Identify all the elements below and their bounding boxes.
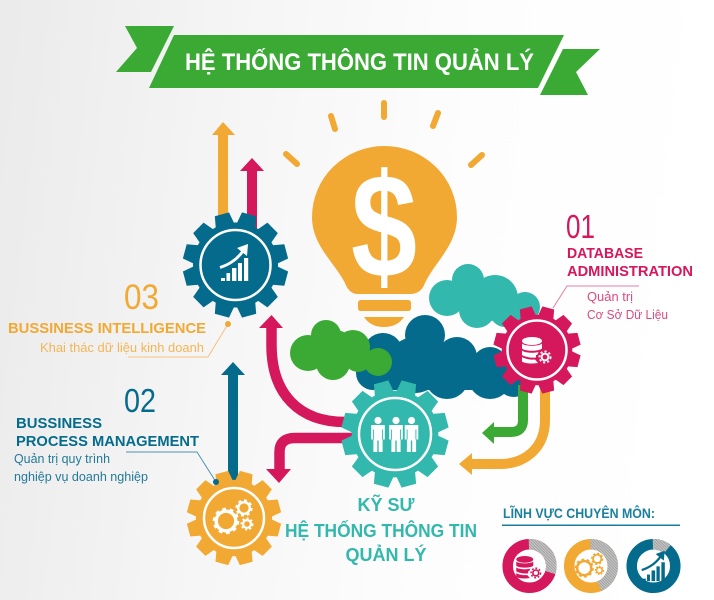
label 01: database administration: ADMINISTRATION [567, 263, 693, 280]
legend: fields of expertise: LĨNH VỰC CHUYÊN MÔN: [503, 504, 655, 521]
bulb base [358, 300, 411, 311]
light bulb with dollar sign [286, 103, 482, 327]
center label: engineer [285, 494, 477, 565]
arrow: green curved left [482, 385, 523, 444]
label 02: business process management: 02 [124, 382, 156, 419]
label 01: database administration [553, 208, 693, 322]
label 01: database administration: Quản trị [587, 290, 633, 304]
center label: engineer: HỆ THỐNG THÔNG TIN [285, 520, 477, 541]
title: HỆ THỐNG THÔNG TIN QUẢN LÝ [185, 47, 534, 76]
arrow: pink curved up [259, 315, 352, 422]
dark blue cloud [356, 315, 533, 399]
gear: engineers [341, 380, 449, 488]
label 03: business intelligence [8, 278, 231, 357]
arrow: blue up [221, 362, 245, 482]
arrow: orange up [212, 122, 235, 225]
label 03: business intelligence: Khai thác dữ liệu kinh doanh [40, 340, 204, 355]
gear: process management [186, 470, 282, 566]
banner body [149, 35, 564, 88]
dollar sign: $ [351, 144, 417, 309]
label 02: business process management: PROCESS MANAGEMENT [16, 433, 199, 450]
label 02: business process management: nghiệp vụ doanh nghiệp [14, 470, 148, 484]
center label: engineer: KỸ SƯ [358, 494, 415, 515]
label 02: business process management [14, 382, 219, 485]
arrow: orange curved left [459, 385, 545, 475]
donut: chart [632, 544, 675, 588]
clouds [290, 264, 540, 399]
gear: business intelligence [182, 212, 289, 318]
label 02: business process management: Quản trị quy trình [14, 452, 110, 466]
green cloud [290, 320, 392, 380]
icon: database [522, 337, 553, 365]
arrow: pink curved down [266, 438, 352, 483]
label 03: business intelligence: 03 [124, 278, 159, 317]
center label: engineer: QUẢN LÝ [346, 544, 426, 565]
gear: database [493, 306, 581, 394]
bulb glass [312, 146, 457, 294]
icon: cogs [214, 500, 252, 533]
title banner [116, 26, 600, 95]
teal cloud [429, 264, 540, 328]
banner right tail [540, 49, 600, 95]
icon: three people [371, 417, 418, 452]
label 02: business process management: BUSSINESS [16, 415, 102, 432]
legend: fields of expertise [502, 504, 680, 588]
icon: growth chart [220, 244, 248, 281]
arrows [212, 122, 545, 483]
bulb rays [286, 103, 482, 165]
donut: database [508, 544, 551, 588]
bulb tip [364, 317, 404, 327]
donut: cogs [569, 544, 613, 588]
label 01: database administration: Cơ Sở Dữ Liệu [587, 308, 668, 322]
label 03: business intelligence: BUSSINESS INTELLIGENCE [8, 320, 206, 337]
banner left tail [116, 26, 174, 72]
label 01: database administration: 01 [566, 208, 595, 245]
arrow: pink up [240, 158, 264, 235]
label 01: database administration: DATABASE [567, 245, 643, 262]
